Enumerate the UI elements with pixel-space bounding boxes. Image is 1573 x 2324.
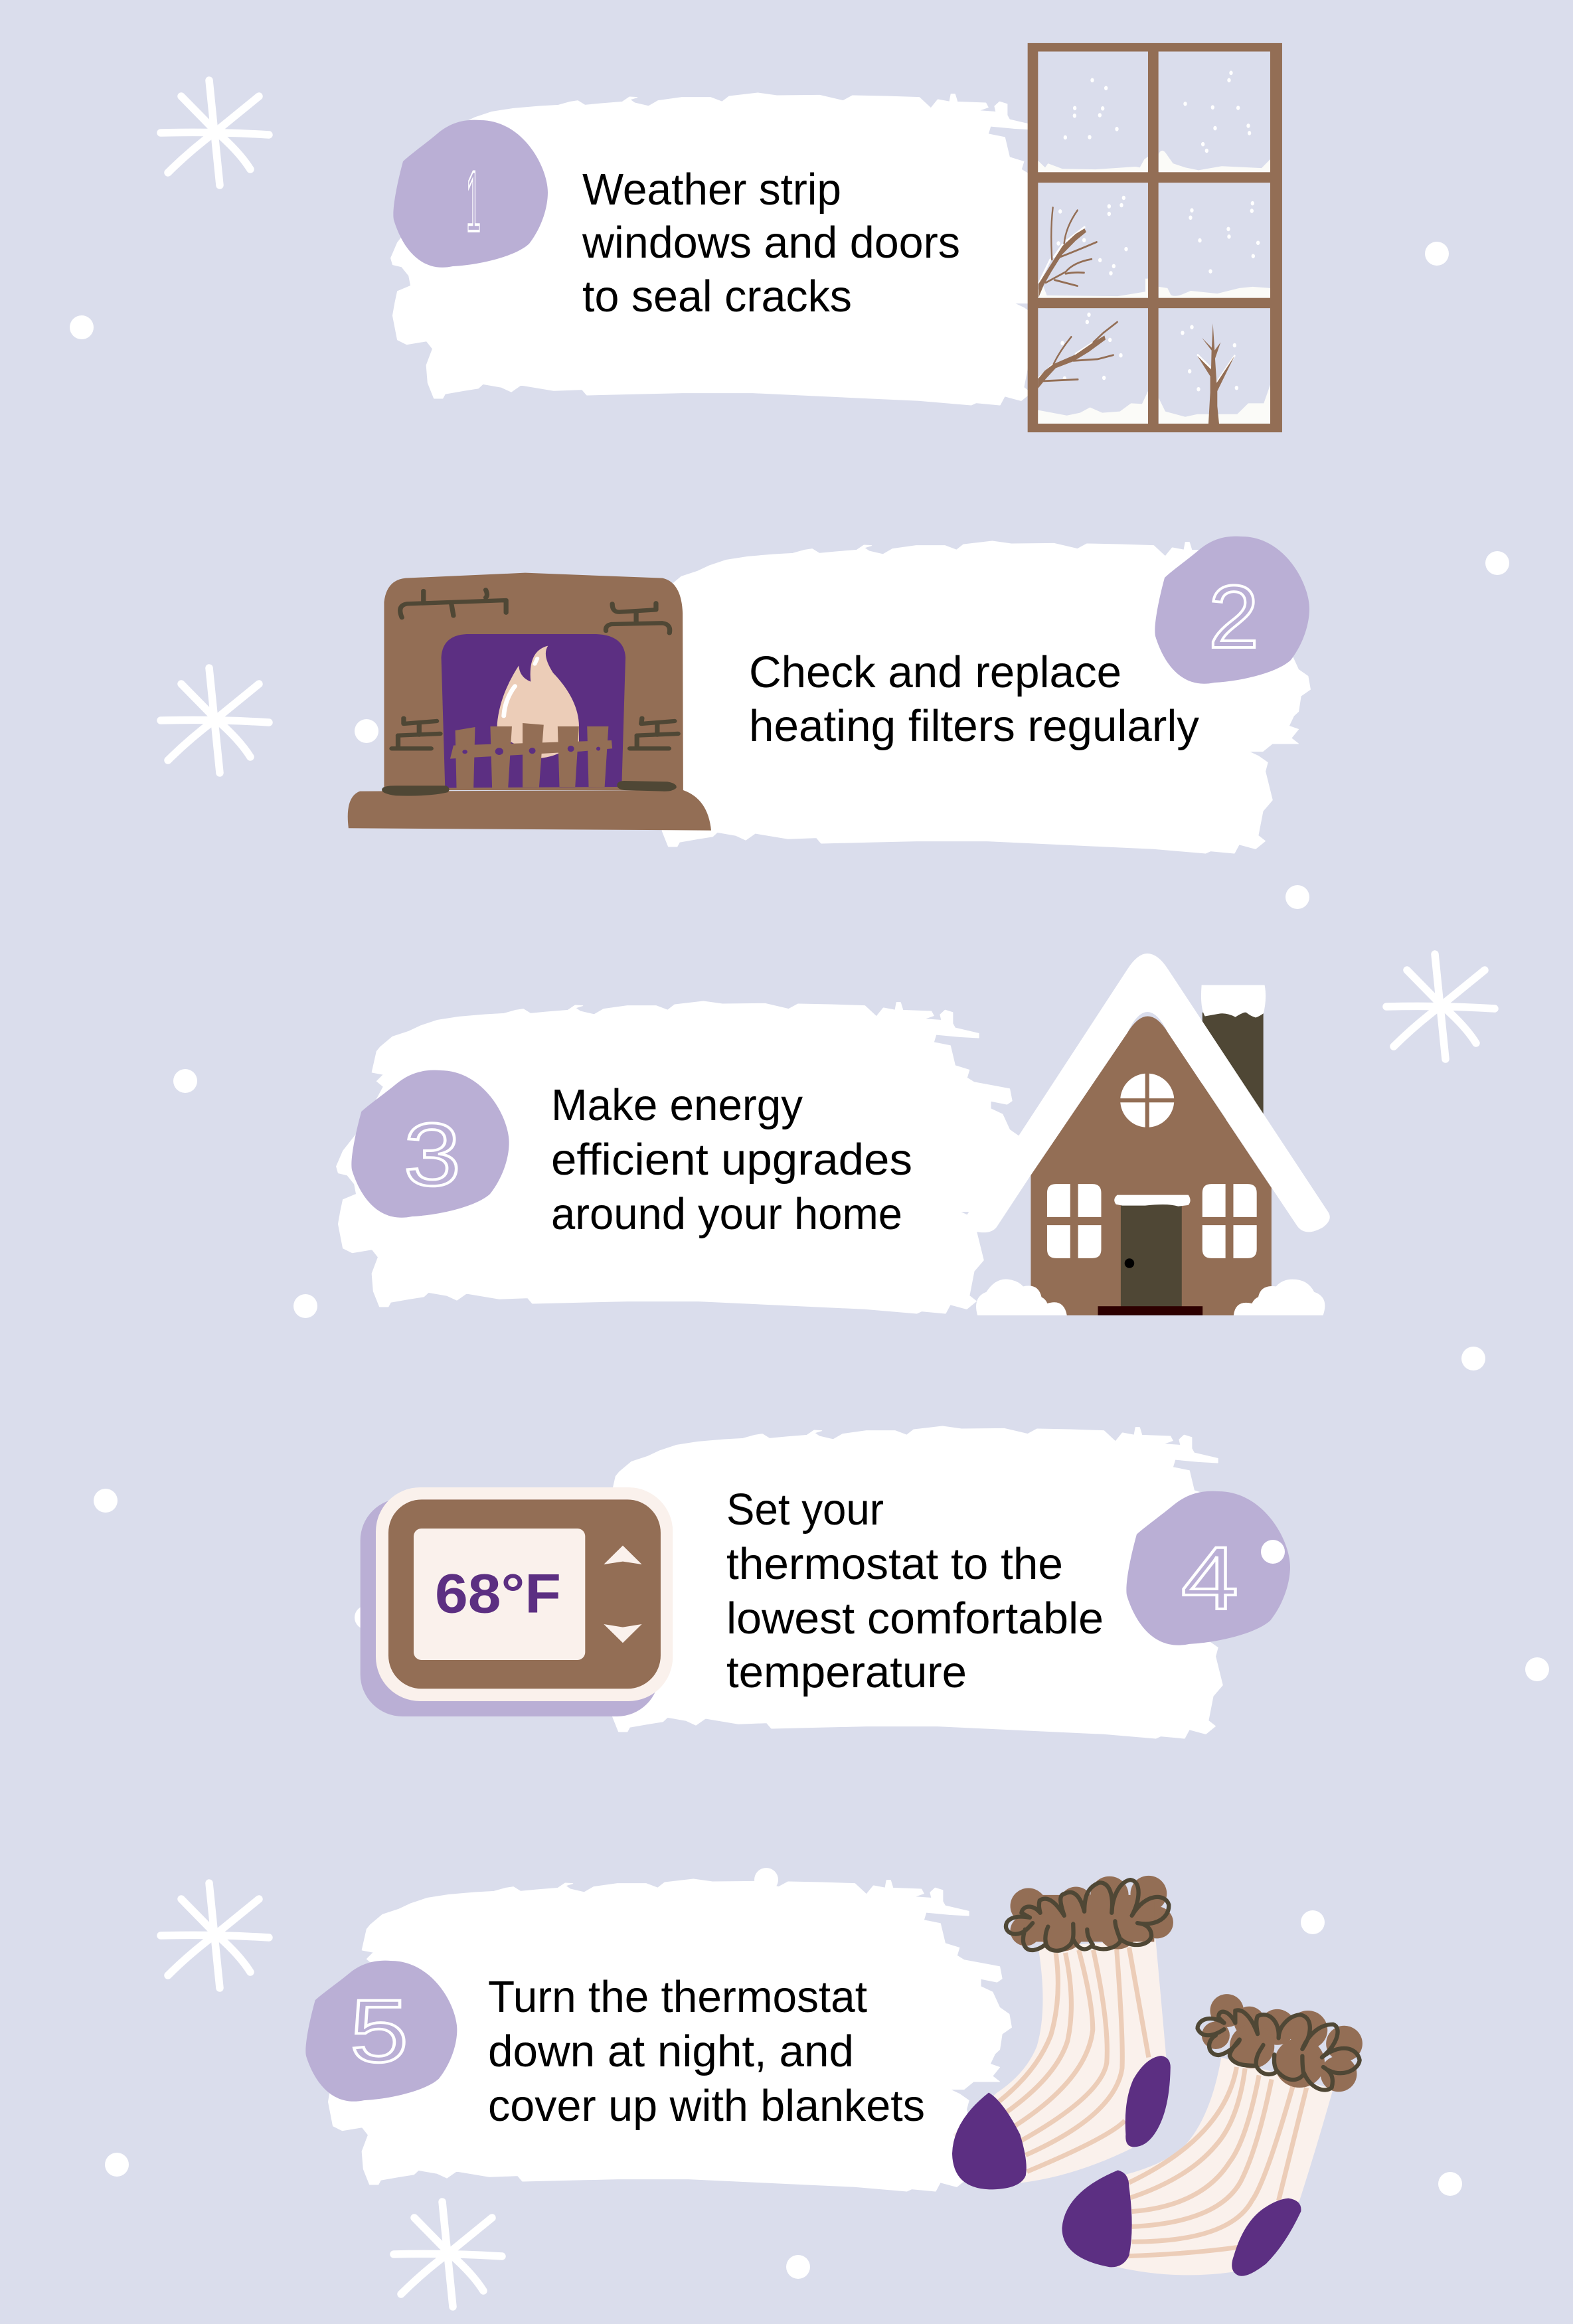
- text: step 2: [749, 647, 1199, 751]
- text: step 2: Check and replace: [749, 647, 1121, 697]
- text: step 3: around your home: [551, 1189, 902, 1239]
- text: step 1: [582, 165, 960, 321]
- text: step 4: thermostat to the: [726, 1539, 1063, 1589]
- text: step 5: down at night, and: [488, 2027, 854, 2076]
- brush background 1: [391, 93, 1076, 405]
- text: step 3: [551, 1080, 912, 1239]
- panel: step 3 energy upgrades: [337, 954, 1330, 1315]
- number badge 3: 3: [404, 1106, 461, 1204]
- text: step 1: to seal cracks: [582, 272, 852, 321]
- temperature reading: 68°F: [435, 1562, 561, 1624]
- number badge 5: [305, 1961, 457, 2102]
- text: step 4: [726, 1485, 1104, 1697]
- icon: snowy house: [964, 954, 1330, 1315]
- text: step 3: efficient upgrades: [551, 1135, 912, 1185]
- text: step 4: Set your: [726, 1485, 884, 1535]
- brush background 4: [576, 1426, 1260, 1738]
- panel: step 2 heating filters: [348, 537, 1310, 853]
- icon: snowy window: [1028, 43, 1282, 432]
- icon: thermostat: [361, 1487, 673, 1716]
- text: step 4: lowest comfortable: [726, 1594, 1104, 1643]
- number badge 4: 4: [1181, 1529, 1238, 1628]
- number badge 3: [351, 1070, 509, 1218]
- brush background 3: [337, 1001, 1021, 1313]
- number badge 5: 5: [350, 1982, 408, 2081]
- icon: wool socks: [952, 1876, 1363, 2276]
- text: step 1: windows and doors: [582, 218, 960, 268]
- panel: step 1 weather strip: [391, 43, 1282, 432]
- text: step 5: Turn the thermostat: [488, 1972, 867, 2022]
- icon: fireplace: [348, 573, 711, 831]
- panel: step 5 night setting: [305, 1876, 1363, 2276]
- brush background 2: [625, 541, 1310, 853]
- number badge 2: [1155, 537, 1309, 684]
- text: step 2: heating filters regularly: [749, 701, 1199, 751]
- number badge 4: [1126, 1491, 1290, 1645]
- text: step 4: temperature: [726, 1647, 967, 1697]
- text: step 3: Make energy: [551, 1080, 803, 1130]
- text: step 1: Weather strip: [582, 165, 841, 214]
- text: step 5: cover up with blankets: [488, 2081, 925, 2131]
- text: step 5: [488, 1972, 925, 2131]
- brush background 5: [327, 1879, 1011, 2191]
- panel: step 4 thermostat: [361, 1426, 1290, 1738]
- number badge 2: 2: [1208, 568, 1259, 667]
- number badge 1: 1: [466, 153, 481, 250]
- number badge 1: [393, 120, 548, 268]
